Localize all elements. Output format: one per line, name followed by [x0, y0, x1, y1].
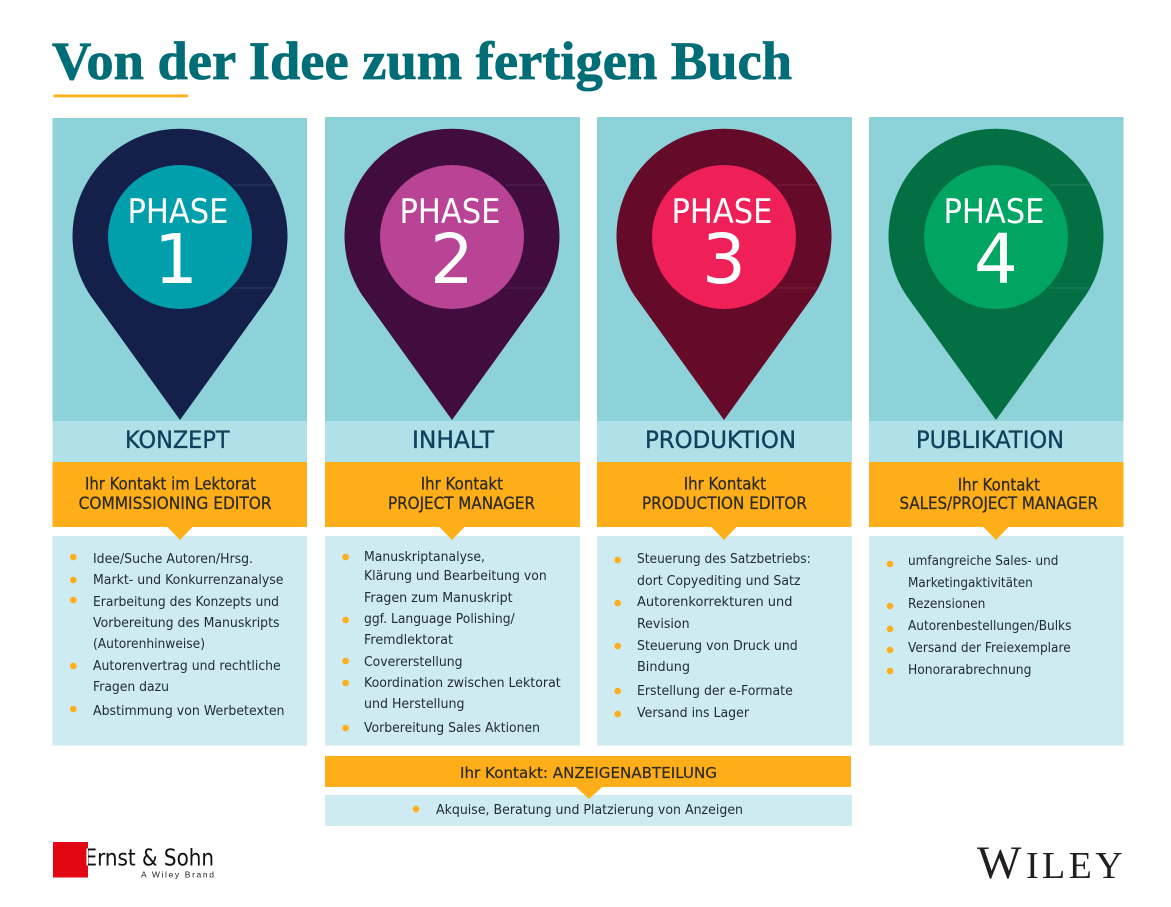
icon: phase 1 map pin: PHASE: [128, 192, 228, 232]
list: phase 3 tasks: Bindung: [637, 660, 690, 675]
icon: phase 4 map pin: PHASE: [944, 192, 1044, 232]
list: phase 1 tasks: Markt- und Konkurrenzanalyse: [93, 573, 284, 588]
list: phase 1 tasks: Autorenvertrag und rechtliche: [93, 659, 281, 674]
contact box: production editor: PRODUCTION EDITOR: [642, 494, 807, 513]
heading: Publikation: [869, 421, 1124, 462]
heading: Publikation: PUBLIKATION: [916, 426, 1064, 454]
panel: phase 4 Publikation: [869, 117, 1124, 746]
list: phase 2 tasks: ggf. Language Polishing/: [364, 612, 515, 627]
icon: phase 3 map pin: 3: [702, 220, 746, 300]
heading: Konzept: KONZEPT: [125, 426, 230, 454]
list: phase 4 tasks: [869, 536, 1124, 746]
list: phase 3 tasks: dort Copyediting und Satz: [637, 574, 801, 589]
contact box: production editor: [597, 462, 852, 540]
list: phase 1 tasks: Abstimmung von Werbetexten: [93, 704, 284, 719]
list: phase 1 tasks: (Autorenhinweise): [93, 637, 205, 652]
list: phase 2 tasks: Fragen zum Manuskript: [364, 591, 513, 606]
list: phase 3 tasks: Steuerung des Satzbetriebs:: [637, 552, 811, 567]
contact box: project manager: PROJECT MANAGER: [388, 494, 535, 513]
list: phase 3 tasks: Versand ins Lager: [637, 706, 750, 721]
title: Von der Idee zum fertigen Buch: [52, 31, 792, 91]
list: phase 2 tasks: Klärung und Bearbeitung von: [364, 569, 547, 584]
list: phase 2 tasks: Covererstellung: [364, 655, 462, 670]
list: phase 3 tasks: Revision: [637, 617, 690, 632]
contact box: project manager: Ihr Kontakt: [421, 474, 503, 494]
list: phase 2 tasks: [325, 536, 580, 746]
contact box: sales project manager: [869, 462, 1124, 540]
heading: Produktion: [597, 421, 852, 462]
panel: phase 3 Produktion: [597, 117, 852, 746]
list: phase 4 tasks: Autorenbestellungen/Bulks: [908, 619, 1072, 634]
icon: phase 3 map pin: PHASE: [672, 192, 772, 232]
list: phase 1 tasks: [52, 536, 307, 746]
panel: Anzeigenabteilung: [325, 756, 852, 826]
heading: Inhalt: INHALT: [412, 426, 494, 454]
list: phase 1 tasks: Fragen dazu: [93, 680, 169, 695]
list: phase 1 tasks: Idee/Suche Autoren/Hrsg.: [93, 552, 253, 567]
contact box: project manager: [325, 462, 580, 540]
logo: Ernst & Sohn: [53, 842, 214, 880]
heading: Inhalt: [325, 421, 580, 462]
icon: phase 1 map pin: [73, 129, 288, 420]
list: phase 2 tasks: Koordination zwischen Lektorat: [364, 676, 561, 691]
logo: Ernst & Sohn: A Wiley Brand: [141, 870, 214, 880]
icon: phase 4 map pin: 4: [974, 220, 1018, 300]
icon: phase 4 map pin: [888, 129, 1104, 420]
contact box: commissioning editor: [52, 462, 307, 540]
icon: phase 2 map pin: [344, 129, 560, 420]
list: phase 4 tasks: Versand der Freiexemplare: [908, 641, 1071, 656]
list: phase 2 tasks: Vorbereitung Sales Aktionen: [364, 721, 540, 736]
logo: Wiley: W: [977, 837, 1022, 889]
list: phase 4 tasks: Rezensionen: [908, 597, 985, 612]
list: phase 2 tasks: Fremdlektorat: [364, 633, 453, 648]
list: phase 4 tasks: Marketingaktivitäten: [908, 576, 1033, 591]
list: phase 2 tasks: Manuskriptanalyse,: [364, 550, 485, 565]
list: phase 3 tasks: Erstellung der e-Formate: [637, 684, 793, 699]
list: phase 3 tasks: [597, 536, 852, 746]
list: phase 1 tasks: Vorbereitung des Manuskripts: [93, 616, 280, 631]
icon: phase 2 map pin: PHASE: [400, 192, 500, 232]
list: phase 3 tasks: Autorenkorrekturen und: [637, 595, 792, 610]
contact box: production editor: Ihr Kontakt: [684, 474, 766, 494]
list: phase 4 tasks: Honorarabrechnung: [908, 663, 1031, 678]
contact box: commissioning editor: Ihr Kontakt im Lektorat: [85, 474, 256, 494]
panel: phase 2 Inhalt: [325, 117, 580, 746]
logo: Ernst & Sohn: Ernst & Sohn: [84, 846, 214, 872]
list: phase 3 tasks: Steuerung von Druck und: [637, 639, 798, 654]
list: phase 4 tasks: umfangreiche Sales- und: [908, 554, 1058, 569]
icon: phase 1 map pin: 1: [154, 220, 198, 300]
heading: Produktion: PRODUKTION: [645, 426, 796, 454]
icon: phase 3 map pin: [616, 129, 832, 420]
heading: Konzept: [52, 421, 307, 462]
panel: phase 1 Konzept: [52, 118, 307, 746]
contact box: Anzeigenabteilung: [325, 756, 851, 799]
contact box: sales project manager: SALES/PROJECT MANAGER: [900, 494, 1098, 513]
logo: Wiley: ILEY: [1026, 845, 1126, 887]
contact box: commissioning editor: COMMISSIONING EDITOR: [79, 494, 272, 513]
contact box: sales project manager: Ihr Kontakt: [958, 476, 1040, 494]
list: phase 2 tasks: und Herstellung: [364, 697, 464, 712]
list: phase 1 tasks: Erarbeitung des Konzepts und: [93, 595, 279, 610]
icon: phase 2 map pin: 2: [430, 220, 474, 300]
logo: Wiley: [977, 837, 1126, 889]
contact box: Anzeigenabteilung: Ihr Kontakt: ANZEIGENABTEILUNG: [460, 764, 717, 782]
text: Anzeigen task: Akquise, Beratung und Platzierung von Anzeigen: [436, 803, 743, 818]
